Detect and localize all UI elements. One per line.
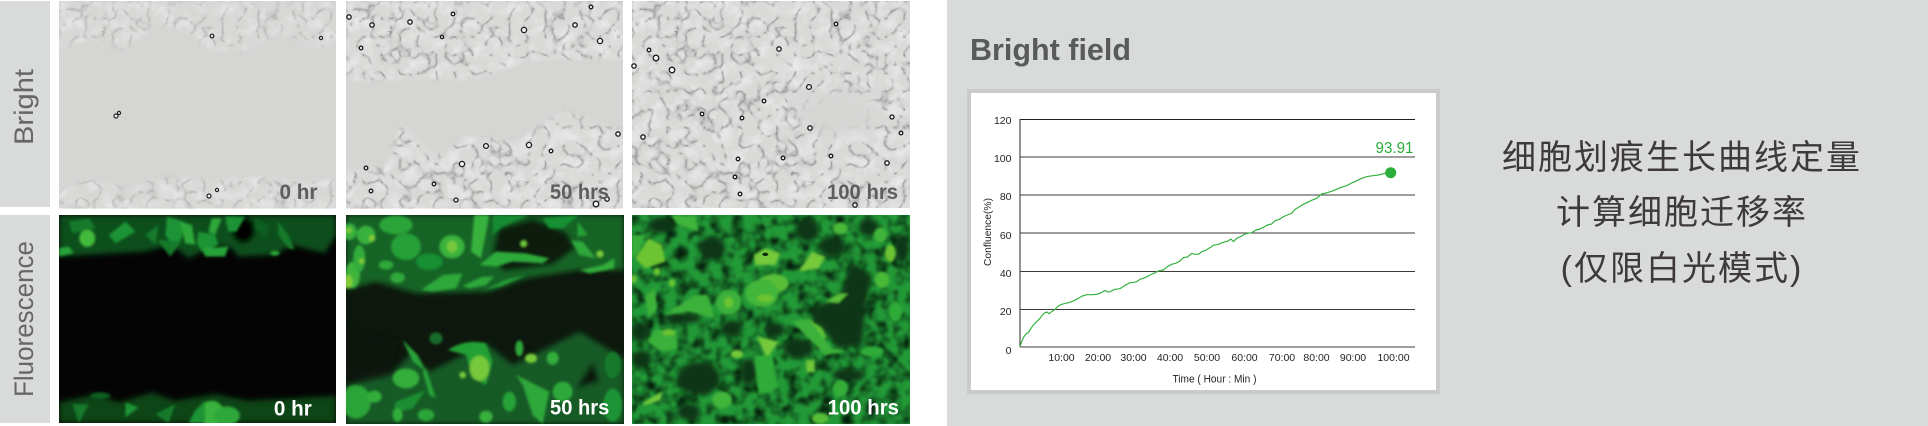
label: 100 hrs: 100 hrs (828, 396, 899, 419)
heading: Bright field: Bright field (970, 32, 1131, 67)
y axis labels: 40 (1000, 268, 1012, 280)
x axis labels: 30:00 (1120, 352, 1147, 364)
y axis labels: 80 (1000, 191, 1012, 203)
y axis labels: 120 (994, 115, 1012, 127)
y axis labels (994, 115, 1012, 357)
label: 0 hr: 0 hr (274, 398, 312, 421)
x axis labels: 70:00 (1269, 352, 1295, 364)
micrograph: fluorescence 100 hrs (632, 215, 910, 424)
label: 50 hrs: 50 hrs (550, 396, 609, 419)
value label: 93.91 (1376, 140, 1414, 157)
panel: row label Bright (0, 1, 50, 207)
panel: row label Fluorescence: Fluorescence (9, 241, 39, 397)
y axis title: Confluence(%) (982, 198, 994, 266)
x axis labels: 20:00 (1085, 352, 1111, 364)
x axis labels: 100:00 (1377, 352, 1410, 364)
x axis labels: 60:00 (1231, 352, 1258, 364)
x axis labels: 80:00 (1303, 352, 1330, 364)
x axis labels: 10:00 (1048, 352, 1075, 364)
y axis labels: 0 (1006, 345, 1012, 357)
description text: 计算细胞迁移率 (1556, 194, 1808, 232)
micrograph: fluorescence 50 hrs (346, 215, 624, 424)
micrograph: bright field 100 hrs (632, 1, 910, 208)
x axis labels: 40:00 (1157, 352, 1183, 364)
panel: row label Fluorescence (0, 215, 50, 423)
micrograph: fluorescence 0 hr (59, 215, 336, 423)
description text: (仅限白光模式) (1561, 250, 1803, 288)
x axis labels: 50:00 (1194, 352, 1220, 364)
label: 0 hr: 0 hr (280, 181, 318, 204)
curve (1020, 173, 1391, 347)
x axis labels (1048, 352, 1410, 364)
chart: confluence curve (969, 91, 1438, 392)
x axis labels: 90:00 (1340, 352, 1366, 364)
panel: row label Bright: Bright (9, 68, 39, 145)
description text: 细胞划痕生长曲线定量 (1502, 139, 1862, 177)
micrograph: bright field 0 hr (59, 1, 336, 209)
y axis labels: 100 (994, 153, 1012, 165)
micrograph: bright field 50 hrs (346, 1, 623, 209)
y axis labels: 60 (1000, 230, 1012, 242)
description text (1502, 139, 1862, 288)
panel: bright field result (947, 0, 1928, 426)
label: 50 hrs: 50 hrs (550, 181, 609, 204)
label: 100 hrs: 100 hrs (827, 181, 898, 204)
end point marker (1385, 167, 1396, 178)
x axis title: Time ( Hour : Min ) (1172, 374, 1256, 386)
y axis labels: 20 (1000, 306, 1012, 318)
